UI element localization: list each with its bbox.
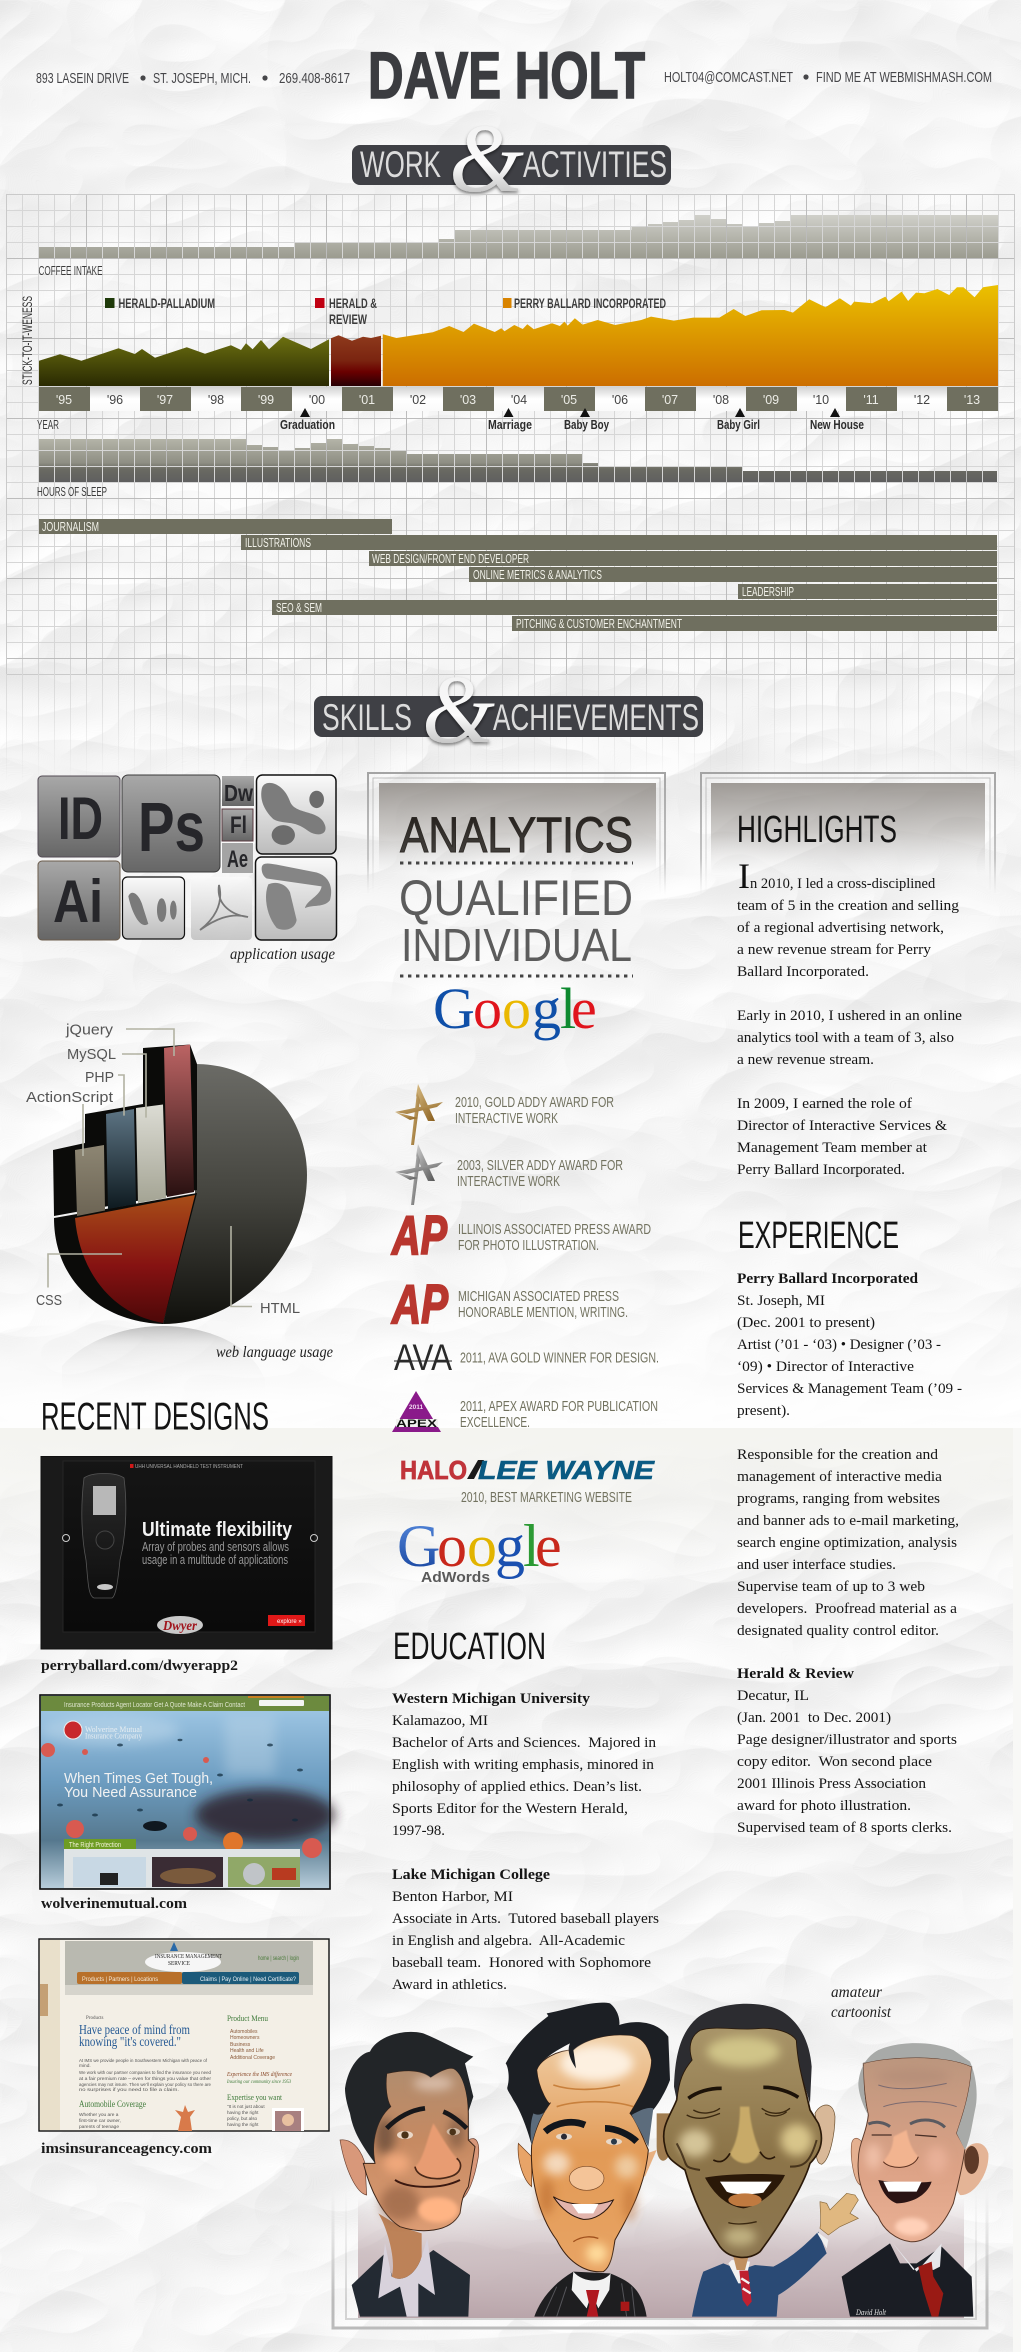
text: Perry Ballard experience: Artist (’01 - ‘03) • Designer (’03 - [737, 1337, 941, 1353]
logo: Google: G [433, 976, 475, 1041]
text: highlights copy: Management Team member at [737, 1140, 927, 1156]
text: Lake Michigan College: in English and algebra. All-Academic [392, 1933, 625, 1949]
screenshot: IMS insurance: mind. [79, 2063, 91, 2069]
bar: ActionScript [75, 1145, 105, 1216]
text: Herald and Review experience: (Jan. 2001 to Dec. 2001) [737, 1710, 891, 1726]
text: Western Michigan University: Bachelor of Arts and Sciences. Majored in [392, 1735, 657, 1751]
skill timeline bars: PITCHING & CUSTOMER ENCHANTMENT [516, 617, 682, 631]
screenshot: IMS insurance: Health and Life [230, 2048, 264, 2054]
text: highlights copy: analytics tool with a team of 3, also [737, 1030, 954, 1046]
illustration: caricature one [340, 2032, 479, 2317]
text: highlights copy: Early in 2010, I ushered in an online [737, 1008, 962, 1024]
logo: Google AdWords: o [437, 1513, 467, 1579]
screenshot: IMS insurance [39, 1939, 329, 2131]
header: contact details right [664, 70, 992, 86]
screenshot: IMS insurance: Business [230, 2042, 251, 2048]
caption: imsinsuranceagency.com: imsinsuranceagency.com [41, 2141, 213, 2157]
header: contact details left: 269.408-8617 [279, 71, 350, 87]
icon: Word-like application [122, 877, 184, 939]
screenshot: Dwyer app: Dwyer [162, 1619, 197, 1634]
icon: Flash: Fl [230, 812, 247, 839]
icon: After Effects [222, 843, 253, 873]
label: coffee intake: COFFEE INTAKE [38, 263, 103, 278]
logo: Google AdWords: l [523, 1513, 540, 1579]
panel: highlights [701, 773, 995, 1178]
header: contact details left: ST. JOSEPH, MICH. [153, 71, 251, 87]
caption: application usage: application usage [230, 946, 335, 963]
year axis bar: '95 [56, 393, 72, 407]
year axis bar: '07 [662, 393, 678, 407]
text: Perry Ballard experience: developers. Proofread material as a [737, 1601, 958, 1617]
icon: InDesign: ID [58, 785, 103, 852]
icon: Photoshop [122, 775, 220, 872]
text: Perry Ballard experience: Supervise team of up to 3 web [737, 1579, 925, 1595]
text: Herald and Review experience: Supervised team of 8 sports clerks. [737, 1820, 952, 1836]
screenshot: IMS insurance: Homeowners [230, 2035, 260, 2041]
text: Western Michigan University: philosophy of applied ethics. Dean’s list. [392, 1779, 642, 1795]
illustration: caricature two [506, 2003, 670, 2317]
text: Perry Ballard experience: search engine optimization, analysis [737, 1535, 957, 1551]
icon: InDesign [38, 776, 120, 857]
screenshot: IMS insurance: policy, but also [227, 2116, 257, 2121]
award: APEX: EXCELLENCE. [460, 1415, 530, 1431]
pie labels: ActionScript [26, 1089, 114, 1106]
header: contact details left: 893 LASEIN DRIVE [36, 71, 129, 87]
text: Herald and Review experience: 2001 Illinois Press Association [737, 1776, 927, 1792]
caption: web language usage: web language usage [216, 1344, 333, 1361]
text: Herald and Review experience: copy editor. Won second place [737, 1754, 932, 1770]
text: Perry Ballard experience: and user interface studies. [737, 1557, 896, 1573]
legend: employers: REVIEW [329, 312, 367, 327]
screenshot: Dwyer app [41, 1456, 332, 1649]
award: michigan AP: MICHIGAN ASSOCIATED PRESS [458, 1289, 619, 1305]
award: illinois AP: AP [391, 1204, 447, 1266]
text: Perry Ballard experience: present). [737, 1403, 790, 1419]
award: michigan AP: AP [391, 1273, 448, 1335]
text: highlights copy: of a regional advertising network, [737, 920, 944, 936]
life events markers: Baby Girl [717, 417, 760, 432]
text: Herald and Review experience: award for photo illustration. [737, 1798, 911, 1814]
year axis bar: '04 [511, 393, 527, 407]
award: AVA [394, 1337, 659, 1378]
text: Lake Michigan College: Award in athletics. [392, 1977, 507, 1993]
life events markers: New House [810, 417, 864, 432]
illustration: caricature three [657, 2004, 858, 2317]
text: Perry Ballard experience [737, 1271, 962, 1639]
text: Western Michigan University: Kalamazoo, MI [392, 1713, 488, 1729]
legend: employers: PERRY BALLARD INCORPORATED [514, 296, 666, 311]
award: Halo / Lee Wayne [400, 1455, 655, 1506]
screenshot: Dwyer app: UHH UNIVERSAL HANDHELD TEST INSTRUMENT [135, 1464, 244, 1470]
award: silver addy: 2003, SILVER ADDY AWARD FOR [457, 1158, 623, 1174]
text: Perry Ballard experience: Services & Management Team (’09 - [737, 1381, 962, 1397]
screenshot: IMS insurance: Expertise you want [227, 2092, 283, 2102]
pie labels: jQuery [65, 1022, 114, 1039]
legend: employers: HERALD-PALLADIUM [118, 296, 215, 311]
year axis bar: '02 [410, 393, 426, 407]
screenshot: IMS insurance: at a fair premium rate – even for things you value that other [79, 2076, 211, 2082]
screenshot: Dwyer app: usage in a multitude of applications [142, 1552, 288, 1567]
illustration signature: David Holt [855, 2308, 887, 2317]
screenshot: Wolverine Mutual: Insurance Products Agent Locator Get A Quote Make A Claim Contact [64, 1702, 245, 1709]
caption: perryballard.com: perryballard.com/dwyerapp2 [41, 1658, 238, 1674]
pie labels [26, 1022, 300, 1317]
screenshot: IMS insurance: We work with our partner companies to find the insurance you need [79, 2070, 211, 2076]
screenshot: Wolverine Mutual: You Need Assurance [64, 1784, 197, 1801]
life events markers: Graduation [280, 417, 335, 432]
text: highlights copy: Ballard Incorporated. [737, 964, 869, 980]
award: silver addy [395, 1144, 623, 1205]
section heading: skills and achievements: & [422, 656, 495, 764]
text: highlights copy: team of 5 in the creation and selling [737, 898, 959, 914]
screenshot: Wolverine Mutual: Insurance Company [85, 1732, 142, 1740]
heading: recent designs: RECENT DESIGNS [41, 1396, 269, 1438]
axis label: stick-to-it-weness: STICK-TO-IT-WENESS [19, 296, 35, 385]
year axis bar [39, 387, 998, 411]
text: highlights copy: Director of Interactive Services & [737, 1118, 948, 1134]
icon: Acrobat [191, 877, 252, 940]
screenshot: IMS insurance: At IMS we provide people in Southwestern Michigan with peace of [79, 2058, 208, 2064]
section heading: work and activities: & [449, 105, 524, 213]
pie reflection [62, 1326, 265, 1400]
icon: After Effects: Ae [227, 846, 248, 873]
award: AVA: 2011, AVA GOLD WINNER FOR DESIGN. [460, 1350, 659, 1366]
award: gold addy [395, 1084, 614, 1145]
award: AVA: AVA [394, 1337, 452, 1378]
screenshot: IMS insurance: Products | Partners | Locations [82, 1976, 159, 1983]
screenshot: IMS insurance: Additional Coverage [230, 2055, 275, 2061]
section heading: skills and achievements [314, 656, 703, 764]
life events markers: Marriage [488, 417, 532, 432]
screenshot: IMS insurance: Automobiles [230, 2029, 258, 2035]
award: michigan AP [391, 1273, 628, 1335]
pie slice: CSS [75, 1195, 195, 1323]
leader lines [48, 1029, 252, 1306]
text: Perry Ballard experience: programs, ranging from websites [737, 1491, 940, 1507]
screenshot: IMS insurance: having the right [227, 2122, 259, 2127]
screenshot: IMS insurance: having the right [227, 2110, 259, 2115]
award: gold addy: 2010, GOLD ADDY AWARD FOR [455, 1095, 614, 1111]
screenshot: IMS insurance: knowing "it's covered." [79, 2035, 181, 2050]
heading: highlights: HIGHLIGHTS [737, 809, 897, 851]
text: Perry Ballard experience: designated quality control editor. [737, 1623, 939, 1639]
text: Western Michigan University: 1997-98. [392, 1823, 445, 1839]
icon: Illustrator [38, 861, 120, 940]
award: michigan AP: HONORABLE MENTION, WRITING. [458, 1305, 628, 1321]
award: silver addy: INTERACTIVE WORK [457, 1174, 560, 1190]
title: name: DAVE HOLT [368, 38, 645, 112]
screenshot: Wolverine Mutual [40, 1695, 335, 1889]
text: highlights copy: Perry Ballard Incorporated. [737, 1162, 905, 1178]
screenshot: Wolverine Mutual: When Times Get Tough, [64, 1770, 213, 1787]
skill timeline bars: WEB DESIGN/FRONT END DEVELOPER [372, 552, 529, 566]
screenshot: IMS insurance: Automobile Coverage [79, 2100, 146, 2110]
award: APEX [392, 1391, 658, 1432]
skill timeline bars [39, 519, 997, 631]
text: highlights copy: a new revenue stream for Perry [737, 942, 932, 958]
screenshot: IMS insurance: Experience the IMS difference [226, 2071, 292, 2078]
pie labels: PHP [85, 1069, 114, 1086]
logo: Google: e [571, 976, 597, 1041]
logo: Google AdWords: o [467, 1513, 497, 1579]
award: Halo / Lee Wayne: LEE WAYNE [478, 1455, 655, 1485]
caption: amateur cartoonist [831, 1984, 892, 2021]
logo: Google: g [532, 976, 561, 1041]
logo: Google AdWords: AdWords [421, 1569, 490, 1586]
text: Perry Ballard experience: Responsible for the creation and [737, 1447, 939, 1463]
skill timeline bars: ONLINE METRICS & ANALYTICS [473, 568, 602, 582]
screenshot: IMS insurance: Claims | Pay Online | Need Certificate? [200, 1976, 296, 1983]
year axis bar: '09 [763, 393, 779, 407]
logo: Google: o [502, 976, 531, 1041]
icon: office application bottom [256, 857, 336, 940]
text: Lake Michigan College: Benton Harbor, MI [392, 1889, 513, 1905]
text: Western Michigan University: English with writing emphasis, minored in [392, 1757, 655, 1773]
caption: wolverinemutual.com: wolverinemutual.com [41, 1896, 188, 1912]
logo: Google: o [473, 976, 502, 1041]
label: hours of sleep: HOURS OF SLEEP [37, 484, 107, 499]
screenshot: IMS insurance: Whether you are a [79, 2112, 119, 2118]
award: illinois AP: ILLINOIS ASSOCIATED PRESS AWARD [458, 1222, 651, 1238]
area chart: coffee intake [39, 215, 998, 258]
panel: analytics qualified individual [368, 773, 665, 1041]
heading: qualified: QUALIFIED [399, 870, 633, 926]
chart: web language usage pie with bars [26, 1022, 307, 1400]
year axis bar: '96 [107, 393, 123, 407]
skill timeline bars: ILLUSTRATIONS [245, 536, 311, 550]
heading: experience: EXPERIENCE [738, 1215, 899, 1257]
heading: individual: INDIVIDUAL [401, 919, 632, 971]
text: Perry Ballard experience: St. Joseph, MI [737, 1293, 825, 1309]
pie slice: HTML [163, 1064, 307, 1324]
logo: Google: l [560, 976, 576, 1041]
skill timeline bars: SEO & SEM [276, 601, 322, 615]
screenshot: IMS insurance: no surprises if you need to file a claim. [79, 2087, 179, 2093]
award: Halo / Lee Wayne: HALO [400, 1455, 467, 1485]
awards list [391, 1084, 659, 1586]
award: gold addy: INTERACTIVE WORK [455, 1111, 558, 1127]
screenshot: IMS insurance: INSURANCE MANAGEMENT [155, 1953, 222, 1960]
illustration: caricature panel backdrop [333, 2190, 987, 2328]
text: Herald and Review experience: Page designer/illustrator and sports [737, 1732, 957, 1748]
section heading: skills and achievements: ACHIEVEMENTS [493, 697, 699, 738]
icon: Illustrator: Ai [53, 868, 103, 935]
icon: office application top [256, 775, 336, 854]
legend: employers: HERALD & [329, 296, 377, 311]
life events markers [280, 408, 864, 432]
year axis bar: '05 [561, 393, 577, 407]
screenshot: IMS insurance: "It is not just about [227, 2104, 265, 2109]
screenshot: IMS insurance: agencies may not insure. Then we'll explain your policy so there are [79, 2082, 211, 2088]
screenshot: IMS insurance: Product Menu [227, 2013, 269, 2023]
icon: Photoshop: Ps [138, 788, 205, 866]
year axis bar: '11 [863, 393, 879, 407]
icon: Dreamweaver: Dw [224, 780, 253, 806]
pie labels: HTML [260, 1300, 300, 1317]
screenshot: IMS insurance: home | search | login [258, 1956, 299, 1962]
logo: Google AdWords: g [495, 1513, 525, 1579]
text: Herald and Review experience: Herald & Review [737, 1666, 855, 1682]
section heading: skills and achievements: SKILLS [322, 697, 412, 738]
screenshot: IMS insurance: SERVICE [168, 1960, 190, 1967]
text: Herald and Review experience: Decatur, IL [737, 1688, 809, 1704]
text: Lake Michigan College [392, 1867, 659, 1993]
year axis bar: '00 [309, 393, 325, 407]
screenshot: IMS insurance: Products [86, 2016, 104, 2021]
text: highlights copy: In 2010, I led a cross-disciplined [738, 856, 936, 896]
award: APEX: 2011 [409, 1404, 423, 1411]
heading: education: EDUCATION [393, 1626, 546, 1668]
award: illinois AP: FOR PHOTO ILLUSTRATION. [458, 1238, 599, 1254]
screenshot: IMS insurance: first-time car owner, [79, 2118, 121, 2124]
heading: analytics: ANALYTICS [400, 807, 633, 863]
section heading: work and activities [352, 105, 671, 213]
year axis bar: '13 [964, 393, 980, 407]
section heading: work and activities: ACTIVITIES [523, 144, 667, 185]
year axis bar: '01 [359, 393, 375, 407]
caption: amateur cartoonist: cartoonist [831, 2004, 892, 2021]
award: illinois AP [391, 1204, 651, 1266]
year axis bar: '06 [612, 393, 628, 407]
screenshot: Wolverine Mutual: The Right Protection [69, 1842, 121, 1849]
text: highlights copy: In 2009, I earned the role of [737, 1096, 912, 1112]
award: APEX: 2011, APEX AWARD FOR PUBLICATION [460, 1399, 658, 1415]
text: Lake Michigan College: Associate in Arts. Tutored baseball players [392, 1911, 659, 1927]
life events markers: Baby Boy [564, 417, 610, 432]
text: Perry Ballard experience: ‘09) • Director of Interactive [737, 1359, 914, 1375]
award: Halo / Lee Wayne: 2010, BEST MARKETING WEBSITE [461, 1490, 632, 1506]
application usage icons [38, 775, 336, 963]
pie back: css slice and bar backing [53, 1044, 197, 1324]
screenshot: Dwyer app: Ultimate flexibility [142, 1519, 293, 1541]
text: Herald and Review experience [737, 1666, 957, 1836]
text: Western Michigan University: Sports Editor for the Western Herald, [392, 1801, 628, 1817]
text: Perry Ballard experience: and banner ads to e-mail marketing, [737, 1513, 959, 1529]
screenshot: Dwyer app: Array of probes and sensors allows [142, 1539, 289, 1554]
screenshot: IMS insurance: Insuring our community since 1953 [226, 2079, 291, 2085]
bar: MySQL [136, 1104, 166, 1203]
legend: employers [105, 296, 666, 327]
screenshot: IMS insurance: parents of teenage [79, 2124, 119, 2130]
text: highlights copy [737, 856, 962, 1178]
skill timeline bars: JOURNALISM [42, 520, 99, 534]
skill timeline bars: LEADERSHIP [742, 585, 794, 599]
year axis bar: '03 [460, 393, 476, 407]
logo: Google AdWords: G [397, 1513, 440, 1579]
year axis bar: '08 [713, 393, 729, 407]
text: Lake Michigan College: baseball team. Honored with Sophomore [392, 1955, 651, 1971]
text: Perry Ballard experience: management of interactive media [737, 1469, 943, 1485]
year axis bar: '98 [208, 393, 224, 407]
illustration: caricature four [842, 2043, 988, 2317]
bar: PHP [106, 1109, 136, 1209]
bar: jQuery [164, 1044, 194, 1197]
screenshot: IMS insurance: Have peace of mind from [79, 2023, 190, 2038]
text: Western Michigan University [392, 1691, 657, 1839]
bar chart: hours of sleep [39, 439, 997, 482]
logo: Google AdWords [397, 1513, 562, 1586]
screenshot: Wolverine Mutual: Wolverine Mutual [85, 1725, 143, 1734]
icon: Flash [222, 809, 253, 841]
timeline grid [6, 194, 1015, 784]
year axis bar: '97 [157, 393, 173, 407]
area chart: stick-to-it-weness by employer [39, 285, 998, 386]
label: year: YEAR [37, 417, 59, 432]
caption: amateur cartoonist: amateur [831, 1984, 883, 2001]
year axis bar: '12 [914, 393, 930, 407]
text: Perry Ballard experience: (Dec. 2001 to present) [737, 1315, 875, 1331]
section heading: work and activities: WORK [360, 144, 441, 185]
year axis bar: '10 [813, 393, 829, 407]
logo: Google AdWords: e [535, 1513, 562, 1579]
header: contact details right: HOLT04@COMCAST.NET [664, 70, 793, 86]
pie labels: CSS [36, 1292, 62, 1309]
header: contact details left [36, 71, 350, 87]
pie labels: MySQL [67, 1046, 116, 1063]
award: APEX: APEX [396, 1418, 438, 1430]
text: highlights copy: a new revenue stream. [737, 1052, 874, 1068]
text: Western Michigan University: Western Michigan University [392, 1691, 591, 1707]
screenshot: Dwyer app: explore » [277, 1619, 302, 1625]
text: Perry Ballard experience: Perry Ballard Incorporated [737, 1271, 918, 1287]
text: Lake Michigan College: Lake Michigan College [392, 1867, 551, 1883]
year axis bar: '99 [258, 393, 274, 407]
